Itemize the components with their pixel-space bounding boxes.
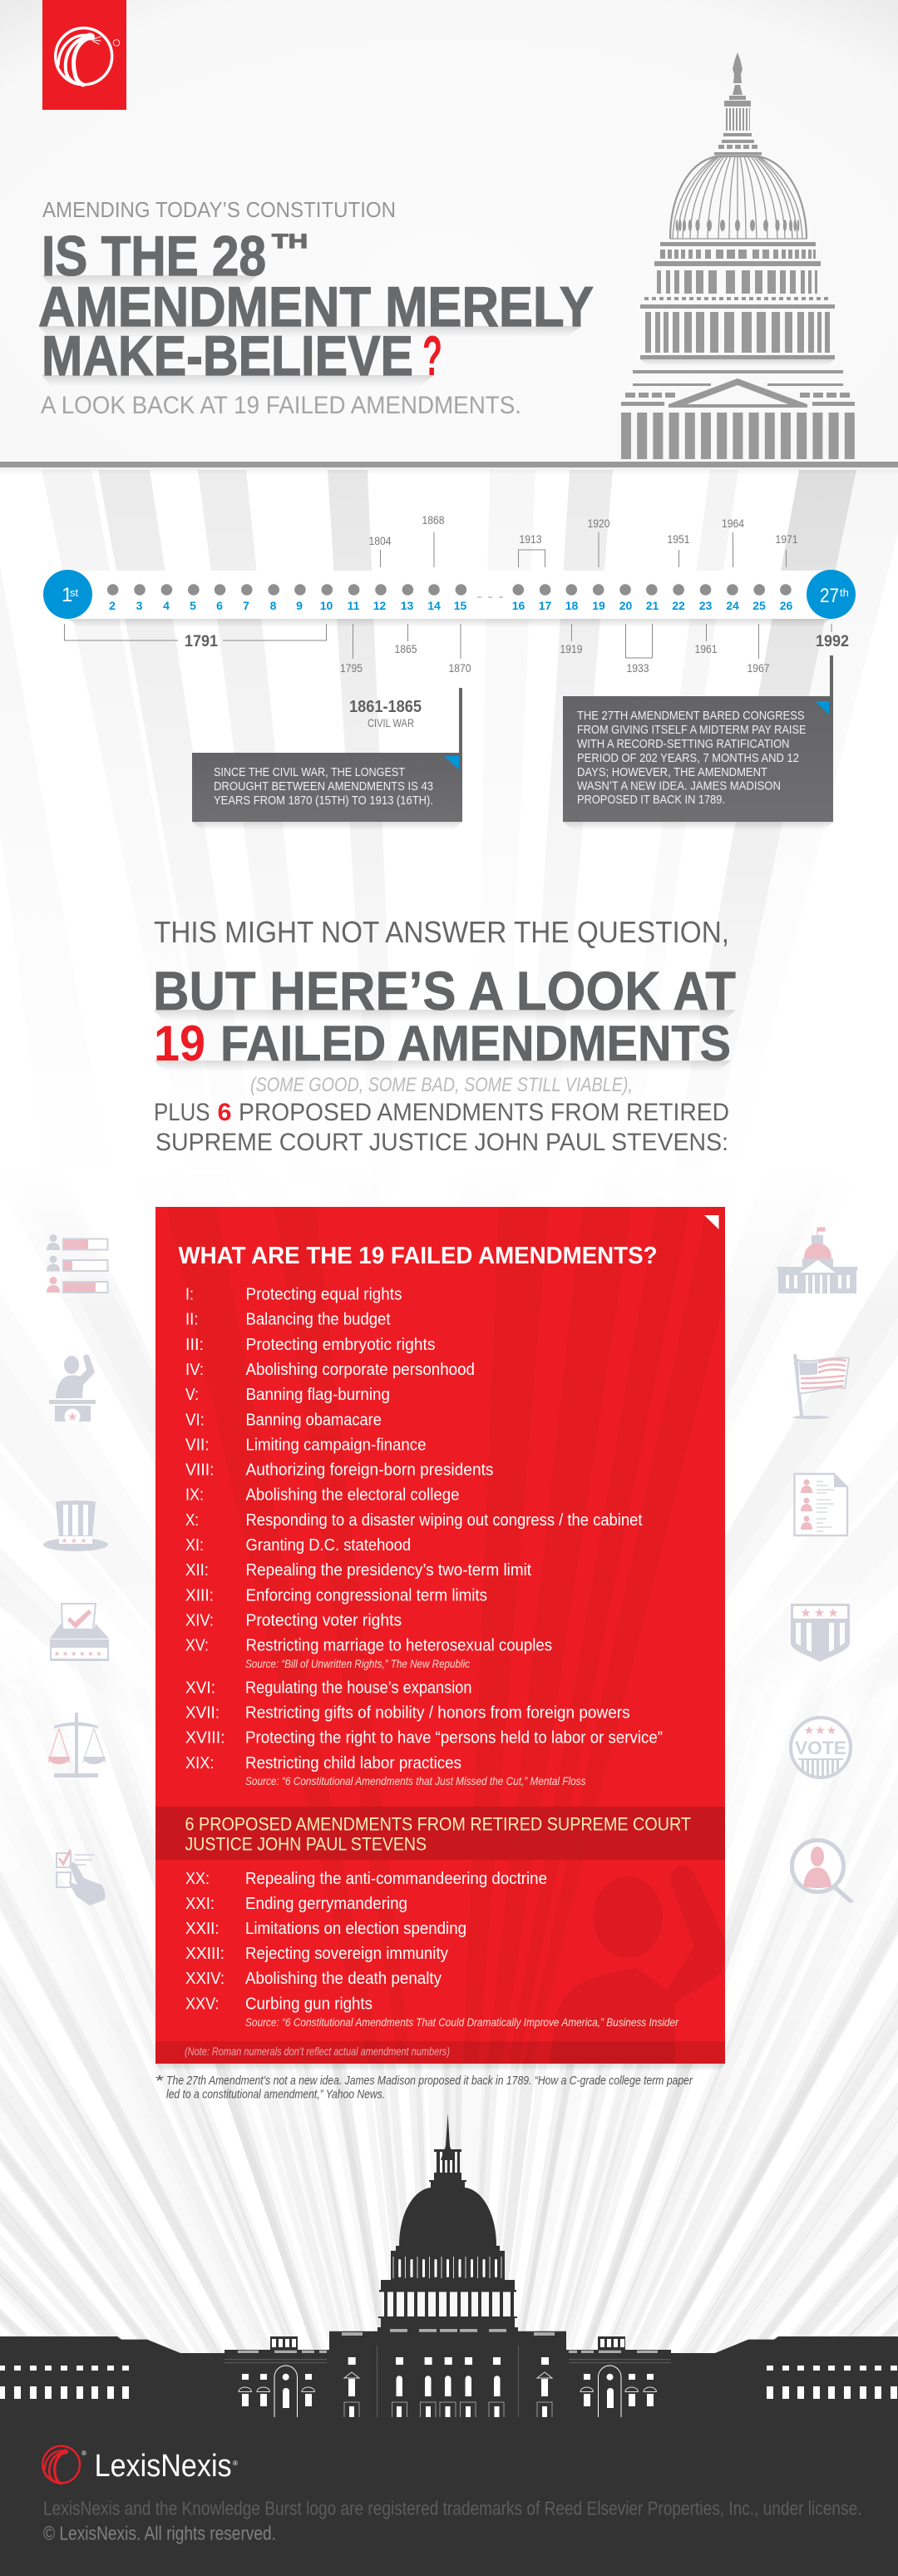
subtitle: A LOOK BACK AT 19 FAILED AMENDMENTS. [41, 392, 521, 419]
icon: small capitol building [777, 1228, 858, 1293]
wordmark: LexisNexis: LexisNexis [95, 2449, 232, 2484]
band: 6 proposed amendments heading: JUSTICE JOHN PAUL STEVENS [185, 1834, 427, 1855]
section heading: PROPOSED AMENDMENTS FROM RETIRED [239, 1099, 729, 1126]
list: amendments I to XIX: Limiting campaign-finance [246, 1436, 426, 1454]
timeline: bar with amendment dots: 17 [539, 599, 551, 612]
footnote [155, 2064, 725, 2101]
list: amendments XX to XXV: Repealing the anti-commandeering doctrine [245, 1870, 547, 1888]
callout: 27th amendment pay raise: FROM GIVING ITSELF A MIDTERM PAY RAISE [577, 723, 807, 737]
callout: 27th amendment pay raise: WITH A RECORD-SETTING RATIFICATION [577, 737, 790, 751]
timeline: bar with amendment dots: 21 [646, 599, 659, 612]
civil war label [349, 698, 422, 729]
marker: 1st amendment [43, 570, 92, 619]
callout: 27th amendment pay raise: PERIOD OF 202 YEARS, 7 MONTHS AND 12 [577, 751, 799, 765]
timeline: bar with amendment dots: 22 [672, 599, 685, 612]
timeline: bar with amendment dots: 25 [752, 599, 766, 612]
timeline: bar with amendment dots: 4 [163, 599, 170, 612]
marker: 27th amendment: 27 [820, 585, 839, 607]
list: amendments I to XIX: XVIII: [185, 1729, 224, 1748]
marker: 1st amendment: 1 [62, 584, 72, 606]
list: amendments I to XIX: Granting D.C. statehood [246, 1536, 411, 1555]
timeline: bar with amendment dots: 8 [270, 599, 277, 612]
list: amendments I to XIX: Protecting equal rights [246, 1286, 402, 1304]
timeline: bar with amendment dots: 3 [136, 599, 143, 612]
timeline: bar with amendment dots: 16 [512, 599, 525, 612]
civil war label: CIVIL WAR [368, 716, 414, 729]
timeline: year labels and brackets: 1964 [722, 517, 744, 530]
list: amendments XX to XXV: XX: [185, 1870, 210, 1888]
list: amendments XX to XXV: Abolishing the death penalty [245, 1970, 442, 1988]
list: amendments I to XIX: Balancing the budget [246, 1311, 391, 1329]
timeline: year labels and brackets: 1868 [422, 513, 445, 527]
list: amendments I to XIX: Restricting marriage to heterosexual couples [246, 1637, 552, 1655]
background rays: lower fan behind the capitol [0, 1753, 898, 2353]
list: amendments I to XIX: Restricting child labor practices [245, 1754, 461, 1773]
list: amendments I to XIX: XV: [185, 1637, 209, 1655]
timeline: year labels and brackets: 1961 [695, 642, 718, 655]
icon: ballot box: ★★★★★★ [54, 1650, 104, 1659]
footnote: The 27th Amendment’s not a new idea. James Madison proposed it back in 1789. “How a C-grade college term paper [166, 2074, 693, 2088]
timeline: bar with amendment dots: 10 [320, 599, 333, 612]
icon: striped shield: ★★★ [800, 1605, 841, 1620]
section heading: (SOME GOOD, SOME BAD, SOME STILL VIABLE), [250, 1074, 633, 1096]
list: amendments XX to XXV: XXIII: [185, 1945, 224, 1963]
band: 6 proposed amendments heading: 6 PROPOSED AMENDMENTS FROM RETIRED SUPREME COURT [185, 1814, 691, 1835]
timeline: year labels and brackets: 1992 [816, 633, 849, 650]
icon: poll bars with people [47, 1234, 108, 1293]
list: amendments I to XIX: XIX: [185, 1754, 214, 1773]
icon: scales of justice [48, 1713, 106, 1777]
timeline: year labels and brackets: 1865 [394, 642, 417, 655]
illustration: capitol dome, grey line art [621, 52, 855, 436]
section heading [153, 915, 736, 1156]
icon: vote button [791, 1718, 851, 1777]
title: IS THE 28 [42, 225, 266, 288]
list: amendments I to XIX: IX: [185, 1486, 204, 1505]
timeline: bar with amendment dots: 9 [296, 599, 303, 612]
timeline: bar with amendment dots: 2 [109, 599, 116, 612]
list: amendments I to XIX: Protecting the right to have “persons held to labor or service” [245, 1729, 663, 1748]
list: amendments I to XIX: II: [185, 1311, 198, 1329]
footnote: * [155, 2073, 164, 2089]
list: amendments I to XIX: Source: “6 Constitutional Amendments that Just Missed the Cut,” Mental Floss [245, 1774, 585, 1787]
wordmark: LexisNexis: ® [233, 2460, 238, 2467]
note band: roman numerals: (Note: Roman numerals don’t reflect actual amendment numbers) [185, 2044, 450, 2058]
callout: 27th amendment pay raise: WASN’T A NEW IDEA. JAMES MADISON [577, 779, 781, 794]
callout: longest drought between amendments [192, 688, 462, 830]
title: MAKE-BELIEVE [42, 324, 413, 388]
section heading: PLUS [154, 1099, 210, 1126]
timeline: bar with amendment dots: 7 [243, 599, 249, 612]
timeline: year labels and brackets: 1919 [560, 642, 583, 655]
list: amendments I to XIX: Protecting embryotic rights [246, 1336, 436, 1354]
section heading: SUPREME COURT JUSTICE JOHN PAUL STEVENS: [155, 1129, 728, 1156]
list: amendments I to XIX: Banning flag-burning [246, 1386, 390, 1404]
list: amendments I to XIX: III: [185, 1336, 204, 1354]
timeline: bar with amendment dots [43, 570, 856, 627]
callout: longest drought between amendments: DROUGHT BETWEEN AMENDMENTS IS 43 [214, 779, 433, 794]
timeline: bar with amendment dots: 13 [401, 599, 413, 612]
list: amendments I to XIX: XVII: [185, 1704, 220, 1723]
marker: 1st amendment: st [70, 586, 78, 599]
illustration: capitol silhouette and footer ground [0, 2114, 898, 2576]
icon: hand checking a form [57, 1850, 105, 1906]
title: ? [422, 324, 442, 388]
list: amendments XX to XXV: Curbing gun rights [245, 1995, 373, 2014]
list: amendments I to XIX: Protecting voter rights [246, 1612, 402, 1630]
icon: vote button: ★★★ [804, 1724, 837, 1738]
list: amendments I to XIX: Responding to a disaster wiping out congress / the cabinet [246, 1511, 643, 1530]
list: amendments I to XIX: Authorizing foreign-born presidents [246, 1461, 494, 1479]
timeline: bar with amendment dots: 12 [373, 599, 386, 612]
section heading: 6 [218, 1099, 231, 1126]
list: amendments I to XIX: VI: [185, 1411, 205, 1429]
icon: uncle sam top hat: ★★★ [62, 1537, 90, 1545]
timeline: year labels and brackets: 1804 [369, 534, 392, 547]
icon: uncle sam top hat [43, 1501, 108, 1551]
timeline: year labels and brackets: 1795 [340, 661, 363, 675]
list: amendments I to XIX: XI: [185, 1536, 204, 1555]
timeline: bar with amendment dots: 5 [190, 599, 196, 612]
timeline: bar with amendment dots: 24 [726, 599, 739, 612]
eyebrow: amending today's constitution: AMENDING TODAY’S CONSTITUTION [42, 197, 396, 222]
list: amendments XX to XXV: XXII: [185, 1920, 220, 1938]
section heading: BUT HERE’S A LOOK AT [153, 960, 736, 1021]
list: amendments I to XIX: V: [185, 1386, 199, 1404]
timeline: year labels and brackets: 1951 [667, 532, 690, 546]
list: amendments I to XIX: Repealing the presidency’s two-term limit [246, 1561, 531, 1580]
note band: roman numerals [155, 2041, 725, 2064]
section heading: FAILED AMENDMENTS [220, 1016, 731, 1071]
list: amendments XX to XXV: Limitations on election spending [245, 1920, 466, 1938]
timeline: bar with amendment dots: 11 [348, 599, 360, 612]
logo: LexisNexis footer mark [42, 2446, 80, 2484]
callout: 27th amendment pay raise: DAYS; HOWEVER, THE AMENDMENT [577, 765, 767, 779]
marker: 27th amendment [807, 570, 856, 619]
list: amendments XX to XXV: Source: “6 Constitutional Amendments That Could Dramatically Improve America,” Business Insider [245, 2015, 679, 2029]
list: amendments XX to XXV: Rejecting sovereign immunity [245, 1945, 448, 1963]
list: amendments I to XIX [185, 1286, 663, 1787]
list: amendments XX to XXV: XXI: [185, 1895, 215, 1913]
list: amendments I to XIX: Abolishing corporate personhood [246, 1361, 475, 1379]
list: amendments I to XIX: Regulating the house’s expansion [245, 1679, 472, 1697]
legal text: © LexisNexis. All rights reserved. [43, 2523, 276, 2544]
list: amendments I to XIX: Enforcing congressional term limits [246, 1586, 487, 1604]
logo: red LexisNexis badge [42, 0, 126, 110]
list: amendments I to XIX: XVI: [185, 1679, 215, 1697]
timeline: year labels and brackets: 1971 [775, 532, 798, 546]
list: amendments I to XIX: Source: “Bill of Unwritten Rights,” The New Republic [245, 1657, 470, 1670]
icon: american flag [792, 1354, 849, 1419]
timeline: bar with amendment dots: 26 [780, 599, 792, 612]
title [38, 225, 594, 388]
background rays: side fan behind the red panel [0, 1278, 898, 1612]
section heading: 19 [154, 1016, 205, 1071]
list: amendments I to XIX: Restricting gifts of nobility / honors from foreign powers [245, 1704, 630, 1723]
list: amendments I to XIX: VII: [185, 1436, 210, 1454]
icon: speaker at podium: ★ [67, 1411, 77, 1424]
marker: 27th amendment: th [840, 586, 849, 599]
icon: candidate list document [795, 1474, 847, 1535]
icon: magnifier over person [792, 1840, 854, 1903]
wordmark: LexisNexis: ® [81, 2450, 86, 2457]
list: amendments I to XIX: XII: [185, 1561, 209, 1580]
list: amendments I to XIX: Banning obamacare [246, 1411, 382, 1429]
callout: longest drought between amendments: SINCE THE CIVIL WAR, THE LONGEST [214, 765, 405, 779]
timeline: bar with amendment dots: 6 [216, 599, 223, 612]
list: amendments I to XIX: XIV: [185, 1612, 214, 1630]
icon: speaker at podium [49, 1354, 96, 1424]
timeline: year labels and brackets: 1870 [449, 661, 471, 675]
list: amendments XX to XXV: Ending gerrymandering [245, 1895, 407, 1913]
timeline: bar with amendment dots: 14 [427, 599, 441, 612]
list: amendments I to XIX: XIII: [185, 1586, 214, 1604]
icon: vote button: VOTE [795, 1738, 846, 1758]
footnote: led to a constitutional amendment,” Yahoo News. [166, 2088, 385, 2101]
list: amendments XX to XXV: XXIV: [185, 1970, 224, 1988]
timeline: bar with amendment dots: 15 [454, 599, 466, 612]
timeline: year labels and brackets: 1967 [747, 661, 770, 675]
title: AMENDMENT MERELY [38, 275, 594, 339]
icon: ballot box [50, 1604, 109, 1661]
section heading: THIS MIGHT NOT ANSWER THE QUESTION, [154, 915, 729, 949]
callout: longest drought between amendments: YEARS FROM 1870 (15TH) TO 1913 (16TH). [214, 794, 433, 808]
callout: 27th amendment pay raise [563, 655, 833, 830]
civil war label: 1861-1865 [349, 698, 422, 716]
list: amendments I to XIX: Abolishing the electoral college [246, 1486, 459, 1505]
list: amendments XX to XXV: XXV: [185, 1995, 220, 2014]
icon: striped shield [791, 1604, 850, 1662]
timeline: bar with amendment dots: 23 [699, 599, 712, 612]
capitol windows [0, 2257, 897, 2417]
title: TH [272, 230, 308, 253]
list: amendments I to XIX: IV: [185, 1361, 204, 1379]
timeline: year labels and brackets [65, 513, 849, 675]
header panel [0, 0, 898, 475]
list: amendments I to XIX: VIII: [185, 1461, 215, 1479]
timeline: year labels and brackets: 1913 [519, 532, 542, 546]
timeline: year labels and brackets: 1791 [185, 633, 218, 650]
timeline: bar with amendment dots: 20 [619, 599, 632, 612]
timeline: year labels and brackets: 1933 [627, 661, 649, 675]
list: amendments I to XIX: I: [185, 1286, 194, 1304]
band: 6 proposed amendments heading [155, 1807, 725, 1860]
list: amendments XX to XXV [185, 1870, 679, 2029]
callout: 27th amendment pay raise: PROPOSED IT BACK IN 1789. [577, 793, 725, 807]
timeline: year labels and brackets: 1920 [587, 517, 610, 530]
panel: what are the 19 failed amendments [155, 1207, 728, 2064]
timeline: bar with amendment dots: 19 [592, 599, 605, 612]
panel: what are the 19 failed amendments: WHAT ARE THE 19 FAILED AMENDMENTS? [178, 1243, 657, 1269]
background rays: upper fan [0, 470, 898, 1206]
timeline: bar with amendment dots: 18 [565, 599, 578, 612]
legal text [43, 2497, 861, 2544]
silhouette: speaker with raised arm [550, 1866, 728, 2064]
list: amendments I to XIX: X: [185, 1511, 199, 1530]
callout: 27th amendment pay raise: THE 27TH AMENDMENT BARED CONGRESS [577, 709, 805, 723]
